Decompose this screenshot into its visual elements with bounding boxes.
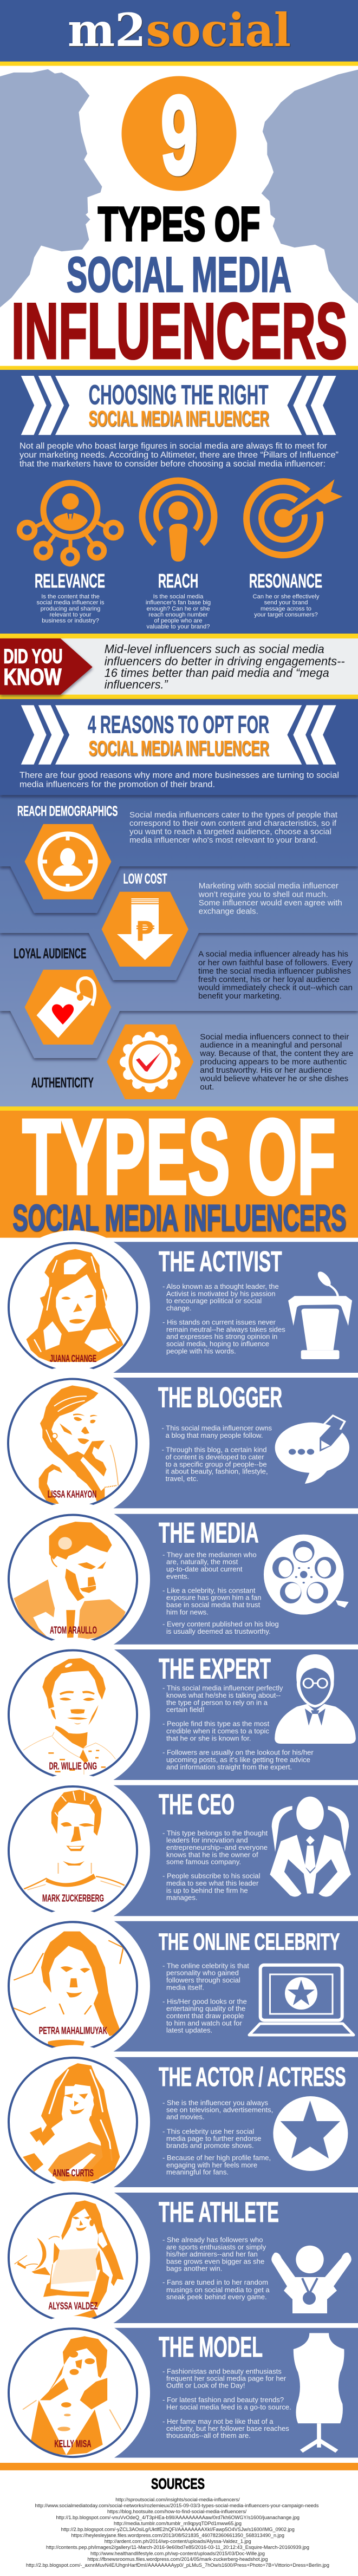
panel: four reasons bands <box>0 699 358 1107</box>
sources list: http://1.bp.blogspot.com/-vnuVvOdeQ_4/T3pHEa-b9lI/AAAAAAAAAaw/0rd7kh6OWGY/s1600/juanachange.jpg <box>56 2515 300 2521</box>
icon: ceo in suit <box>270 1797 351 1897</box>
logo: m2social: m2social <box>68 3 291 57</box>
bullet text: personality who gained <box>166 1969 239 1977</box>
hexagon: heart tag <box>25 970 112 1045</box>
name label: KELLY MISA <box>54 2438 92 2449</box>
number 9: 9 <box>161 73 198 197</box>
bullet text: latest updates. <box>166 2026 212 2034</box>
text: resonance description: message across to <box>261 605 311 612</box>
panel: the ceo <box>0 1774 358 1928</box>
text: relevance description: relevant to your <box>49 611 92 618</box>
heading: THE MEDIA <box>159 1517 259 1549</box>
text: authenticity: audience in a meaningful and personal <box>200 1041 342 1050</box>
icon: resonance target <box>246 479 342 555</box>
heading: THE MODEL <box>159 2331 263 2363</box>
silhouette: left head <box>0 69 102 308</box>
card band <box>113 1242 358 1373</box>
portrait: Juana Change <box>26 1249 123 1362</box>
bullet text: - His stands on current issues never <box>162 1318 276 1326</box>
hexagon: low cost arrow <box>102 892 188 967</box>
bullet text: Her social media feed is a go-to source. <box>166 2403 291 2411</box>
bullet text: - Fashionistas and beauty enthusiasts <box>162 2367 282 2375</box>
panel: choosing the right influencer <box>0 370 358 634</box>
icon: athlete with medal <box>271 2246 352 2313</box>
label: relevance: RELEVANCE <box>35 570 105 592</box>
heading: loyal audience: LOYAL AUDIENCE <box>14 945 86 961</box>
text: low cost: Some influencer would even agree with <box>199 899 342 908</box>
name label: ATOM ARAULLO <box>50 1625 97 1636</box>
sources list: http://2.bp.blogspot.com/-_axnnMuvN4E/UhgnHarfDmI/AAAAAAAAyp0/_pLMuS_7hOw/s1600/Press+Photo+7B+Vittorio+Dress+Berlin.jpg <box>26 2562 329 2568</box>
text: low cost: exchange deals. <box>199 907 258 916</box>
bullet text: media itself. <box>166 1983 204 1991</box>
white cut-out <box>0 2045 150 2199</box>
bullet text: engaging with her feels more <box>166 2161 257 2169</box>
silhouette: right head <box>262 70 358 304</box>
bullet text: the type of person to rely on in a <box>166 1698 268 1706</box>
text: resonance description: Can he or she effectively <box>253 594 320 600</box>
bullet text: are, naturally, the most <box>166 1558 238 1566</box>
bullet text: brands and promote shows. <box>166 2141 254 2150</box>
bullet text: upcoming posts, as it's like getting free advice <box>166 1756 310 1764</box>
hexagon: low cost arrow: ₱ <box>135 916 154 947</box>
panel: the actor / actress <box>0 2045 358 2199</box>
bullet text: and expresses his strong opinion in <box>166 1333 277 1341</box>
name label: LISSA KAHAYON <box>48 1489 96 1500</box>
text: loyal audience: fresh content, his or her loyal audience <box>198 975 340 984</box>
bullet text: credible when it comes to a topic <box>166 1727 269 1735</box>
bullet text: - The online celebrity is that <box>162 1961 249 1970</box>
text: low cost: won’t require you to shell out much. <box>198 891 328 899</box>
text: loyal audience: would immediately check it out--which can <box>198 984 353 993</box>
band: authenticity <box>0 1007 358 1107</box>
text: reach demographics: Social media influencers cater to the types of people that <box>129 811 337 819</box>
bullet text: followers through social <box>166 1976 240 1984</box>
bullet text: - Also known as a thought leader, the <box>162 1282 279 1290</box>
text: reach description: valuable to your brand? <box>147 623 210 630</box>
name label: MARK ZUCKERBERG <box>42 1893 104 1904</box>
portrait: Lissa Kahayon <box>39 1385 118 1504</box>
intro paragraph: your marketing needs. According to Altimeter, there are three “Pillars of Influence” <box>19 451 339 460</box>
text: authenticity: and trustworthy. His or her audience <box>200 1066 332 1075</box>
portrait ring <box>9 2058 137 2186</box>
white cut-out <box>0 1909 150 2063</box>
bullet text: and information straight from the expert. <box>166 1763 292 1771</box>
bullet text: - People subscribe to his social <box>162 1872 261 1880</box>
sources list: http://www.healthandlifestyle.com.ph/wp-content/uploads/2015/03/Doc-Wille.jpg <box>90 2551 265 2557</box>
did you know label: DID YOU <box>3 645 63 667</box>
title line: types of: TYPES OF <box>98 197 260 251</box>
sources list: http://www.socialmediatoday.com/social-networks/rozlemieux/2015-09-03/3-types-social-media-influencers-your-campaign-needs <box>35 2503 319 2509</box>
panel: the media <box>8 1503 358 1645</box>
card band <box>113 2057 358 2187</box>
bullet text: - They are the mediamen who <box>162 1550 257 1558</box>
band: loyal audience <box>0 933 358 1058</box>
bullet text: - Because of her high profile fame, <box>162 2154 271 2162</box>
white cut-out <box>0 2316 150 2470</box>
bullet text: a blog that many people follow. <box>166 1431 263 1439</box>
icon: podium <box>288 1270 352 1359</box>
text: relevance description: Is the content that the <box>41 594 100 600</box>
bullet text: knows that he is the owner of <box>166 1850 258 1858</box>
bullet text: certain field! <box>166 1706 205 1714</box>
bullet text: musings on social media to get a <box>166 2286 270 2294</box>
bullet text: up-to-date about current <box>166 1565 243 1573</box>
text: authenticity: way. Because of that, the content they are <box>199 1049 353 1058</box>
text: resonance description: your target consumers? <box>254 611 318 618</box>
number circle <box>121 76 236 191</box>
portrait ring <box>9 1243 137 1371</box>
white cut-out <box>0 2181 150 2334</box>
card band <box>113 1378 358 1508</box>
portrait ring <box>9 2329 137 2457</box>
sources list: http://ardent.com.ph/2014/wp-content/uploads/Alyssa-Valdez_1.jpg <box>105 2539 251 2545</box>
bullet text: - Every content published on his blog <box>162 1620 279 1628</box>
fact text: influencers do better in driving engagements-- <box>105 654 345 668</box>
bullet text: - She already has followers who <box>162 2235 263 2244</box>
bullet text: of content is developed to cater <box>166 1453 264 1461</box>
heading: authenticity: AUTHENTICITY <box>31 1074 94 1091</box>
bullet text: media page to further endorse <box>166 2134 261 2142</box>
did you know label <box>3 645 63 690</box>
card band <box>113 1785 358 1916</box>
icon: film reel <box>264 1535 349 1615</box>
portrait: Anne Curtis <box>23 2063 120 2185</box>
text: reach demographics: media influencer who's most relevant to your brand. <box>129 836 318 845</box>
sources list: http://2.bp.blogspot.com/-yZCL3AOsiLg/UktlfE2hQFI/AAAAAAAAXkI/Fawp5O4VSJw/s1600/IMG_0902.jpg <box>61 2527 295 2533</box>
bullet text: to him and watch out for <box>166 2019 242 2027</box>
band: reach demographics <box>0 791 358 913</box>
fact text <box>105 642 345 692</box>
sources list <box>26 2497 329 2568</box>
text: low cost: Marketing with social media influencer <box>199 882 339 891</box>
portrait: Dr. Willie Ong <box>23 1658 115 1776</box>
bullet text: bags another win. <box>166 2264 222 2272</box>
card band <box>113 2328 358 2457</box>
sources list: http://sproutsocial.com/insights/social-media-influencers/ <box>115 2497 240 2503</box>
text: reach description: enough? Can he or she <box>147 605 210 612</box>
bullet text: to encourage political or social <box>166 1297 262 1305</box>
portrait ring <box>9 1515 137 1643</box>
section title: types of social media influencers <box>0 1097 358 1239</box>
panel: the model <box>0 2316 358 2470</box>
bullet text: base in social media that trust <box>166 1601 261 1609</box>
bullet text: exposure has grown him a fan <box>166 1594 261 1602</box>
card band <box>113 1649 358 1780</box>
bullet text: - She is the influencer you always <box>162 2098 269 2107</box>
footer bar <box>0 2463 358 2470</box>
bullet text: base grows even bigger as she <box>166 2257 264 2265</box>
bullet text: is usually deemed as trustworthy. <box>166 1627 271 1635</box>
bullet text: media to see what this leader <box>166 1879 259 1887</box>
banner: 4 reasons <box>21 705 336 765</box>
sources list: https://heylesleyjane.files.wordpress.com/2013/08/521835_460782360661350_568313490_n.jpg <box>71 2533 284 2539</box>
bullet text: - Like a celebrity, his constant <box>162 1586 256 1594</box>
bullet text: - Her fame may not be like that of a <box>162 2417 274 2425</box>
text: loyal audience <box>198 950 353 1001</box>
bullet text: - This type belongs to the thought <box>162 1829 268 1837</box>
bullet text: it about beauty, fashion, lifestyle, <box>166 1468 268 1476</box>
hexagon: authenticity badge <box>107 1025 194 1099</box>
name label: JUANA CHANGE <box>50 1353 96 1364</box>
panel: the athlete <box>0 2181 358 2334</box>
reasons intro paragraph <box>19 771 339 789</box>
name label: ANNE CURTIS <box>53 2167 94 2179</box>
portrait ring <box>9 1786 137 1915</box>
bullet text: - His/Her good looks or the <box>162 1998 247 2006</box>
text: reach description: influencer's fan base big <box>146 599 211 606</box>
white cut-out <box>0 1638 150 1791</box>
sources list: http://contents.pep.ph/images2/gallery/11-March-2016-9e60bd7e85/2016-03-11_20:12:43_Esquire-March-20160939.jpg <box>46 2545 309 2551</box>
did you know label: KNOW <box>3 664 62 690</box>
sources list: https://fbnewsroomus.files.wordpress.com/2014/05/mark-zuckerberg-headshot.jpg <box>88 2557 268 2562</box>
bullet text: his/her admirers--and her fan <box>166 2250 258 2258</box>
bullet text: manages. <box>166 1894 198 1902</box>
text: reach description: of people who are <box>154 617 202 624</box>
card band <box>113 2193 358 2323</box>
red arrow tag <box>0 638 93 695</box>
icon: expert with glasses <box>275 1654 356 1744</box>
card band <box>113 1921 358 2051</box>
bullet text: - People find this type as the most <box>162 1720 270 1728</box>
text: relevance description: social media influencer is <box>37 599 105 606</box>
hero title block <box>0 69 358 375</box>
band: low cost <box>0 861 358 980</box>
icon: star in circle <box>273 2096 348 2171</box>
sources heading: SOURCES <box>151 2475 205 2492</box>
text: loyal audience: or her own faithful base of followers. Every <box>198 958 353 967</box>
text: reach description: reach enough number <box>148 611 208 618</box>
panel: the blogger <box>7 1368 358 1509</box>
fact text: 16 times better than paid media and “mega <box>105 666 329 680</box>
heading: reach demographics: REACH DEMOGRAPHICS <box>17 803 118 819</box>
heading: THE EXPERT <box>159 1653 271 1685</box>
icon: dress form <box>294 2333 344 2451</box>
text: authenticity: producing appears to be more authentic <box>200 1058 347 1067</box>
text: authenticity: out. <box>200 1083 214 1092</box>
portrait: Kelly Misa <box>23 2336 121 2455</box>
panel: did you know <box>0 634 358 700</box>
panel: the expert <box>0 1638 358 1791</box>
portrait ring <box>9 1651 137 1778</box>
heading: THE ACTIVIST <box>159 1245 282 1277</box>
white cut-out <box>0 1230 150 1384</box>
text: relevance description: business or industry? <box>42 617 99 624</box>
white cut-out <box>0 1774 150 1928</box>
blue header block <box>0 699 358 795</box>
heading: THE ATHLETE <box>159 2196 279 2228</box>
panel: the activist <box>0 1230 358 1384</box>
bullet text: Outfit or Look of the Day! <box>166 2382 245 2390</box>
white cut-out <box>0 1366 149 1520</box>
icon: laptop with star <box>249 1965 354 2035</box>
white cut-out <box>0 1502 150 1656</box>
heading: THE CEO <box>159 1789 235 1821</box>
hexagon: target audience <box>25 824 112 899</box>
text: loyal audience: A social media influencer already has his <box>198 950 348 959</box>
bullet text: leaders for innovation and <box>166 1836 248 1844</box>
text: reach description: Is the social media <box>153 594 204 600</box>
bullet text: - Through this blog, a certain kind <box>161 1446 267 1454</box>
bullet text: events. <box>166 1572 189 1580</box>
fact text: Mid-level influencers such as social media <box>105 642 324 656</box>
icon: speech bubble and pencil <box>275 1416 349 1484</box>
bullet text: are sports enthusiasts or simply <box>166 2243 266 2251</box>
bullet text: meaningful for fans. <box>166 2168 229 2176</box>
bullet text: see on television, advertisements, <box>166 2105 273 2114</box>
intro paragraph <box>19 441 339 469</box>
bullet text: celebrity, but her follower base reaches <box>166 2424 289 2432</box>
bullet text: Activist is motivated by his passion <box>166 1289 276 1297</box>
intro paragraph: that the marketers have to consider before choosing a social media influencer: <box>19 460 326 469</box>
bullet text: entrepreneurship--and everyone <box>166 1843 268 1851</box>
icon: relevance network <box>19 483 121 564</box>
bullet text: remain neutral--he always takes sides <box>166 1325 285 1333</box>
bullet text: - Followers are usually on the lookout for his/her <box>162 1749 314 1757</box>
text: loyal audience: benefit your marketing. <box>198 992 282 1001</box>
reasons intro paragraph: media influencers for the promotion of their brand. <box>19 780 215 789</box>
text: reach demographics: you want to reach a targeted audience, choose a social <box>129 828 331 837</box>
name label: PETRA MAHALIMUYAK <box>39 2025 107 2036</box>
sources list: https://blog.hootsuite.com/how-to-find-social-media-influencers/ <box>107 2509 247 2515</box>
bullet text: - This social media influencer owns <box>161 1424 272 1432</box>
panel: the online celebrity <box>8 1911 358 2051</box>
bullet text: travel, etc. <box>166 1475 198 1483</box>
label: reach: REACH <box>158 570 198 592</box>
bullet text: entertaining quality of the <box>166 2005 245 2013</box>
bullet text: frequent her social media page for her <box>166 2374 287 2382</box>
bullet text: to a specific group of people--be <box>166 1460 267 1468</box>
portrait: Petra Mahalimuyak <box>11 1932 123 2051</box>
portrait ring <box>9 1922 137 2050</box>
text: authenticity <box>199 1033 353 1092</box>
bullet text: people with his words. <box>166 1347 236 1355</box>
intro paragraph: Not all people who boast large figures in social media are always fit to meet for <box>19 441 327 451</box>
text: loyal audience: time the social media influencer publishes <box>198 967 351 976</box>
text: authenticity: would believe whatever he or she dishes <box>199 1075 348 1084</box>
bullet text: that he or she is known for. <box>166 1734 251 1742</box>
text: resonance description: send your brand <box>264 599 308 606</box>
heading: low cost: LOW COST <box>123 871 167 887</box>
bullet text: knows what he/she is talking about-- <box>166 1691 281 1699</box>
portrait ring <box>9 2193 137 2322</box>
bullet text: - This celebrity use her social <box>162 2127 254 2135</box>
bullet text: and movies. <box>166 2113 205 2121</box>
portrait: Atom Araullo <box>14 1522 126 1641</box>
sources list: http://media.tumblr.com/tumblr_m9qpyqTDPd1mww65.jpg <box>114 2521 242 2527</box>
text: authenticity: Social media influencers connect to their <box>200 1033 349 1041</box>
text: low cost <box>198 882 342 916</box>
name label: ALYSSA VALDEZ <box>48 2300 97 2311</box>
bullet text: content that draw people <box>166 2012 244 2020</box>
icon: reach signal <box>142 480 214 562</box>
bullet text: - Fans are tuned in to her random <box>162 2278 268 2286</box>
text: reach demographics <box>129 811 337 845</box>
bullet text: some famous company. <box>166 1858 241 1866</box>
text: reach demographics: correspond to their own content and characteristics, so if <box>129 819 337 828</box>
fact text: influencers.” <box>105 678 168 692</box>
bullet text: - This social media influencer perfectly <box>162 1684 283 1692</box>
bullet text: is up to behind the firm he <box>166 1886 248 1894</box>
bullet text: sneak peek behind every game. <box>166 2293 267 2301</box>
bullet text: thousands--all of them are. <box>166 2431 251 2440</box>
bullet text: change. <box>166 1304 192 1312</box>
header bar with logo <box>0 0 358 66</box>
bullet text: him for news. <box>166 1608 209 1616</box>
portrait: Alyssa Valdez <box>15 2200 123 2320</box>
bullet text: - For latest fashion and beauty trends? <box>162 2396 284 2404</box>
text: relevance description: producing and sharing <box>41 605 100 612</box>
portrait: Mark Zuckerberg <box>24 1790 125 1890</box>
name label: DR. WILLIE ONG <box>49 1760 97 1771</box>
bullet text: social media, hoping to influence <box>166 1340 269 1348</box>
portrait ring <box>8 1379 136 1508</box>
card band <box>113 1514 358 1645</box>
banner: choosing the right <box>21 376 336 435</box>
reasons intro paragraph: There are four good reasons why more and more businesses are turning to social <box>19 771 339 780</box>
